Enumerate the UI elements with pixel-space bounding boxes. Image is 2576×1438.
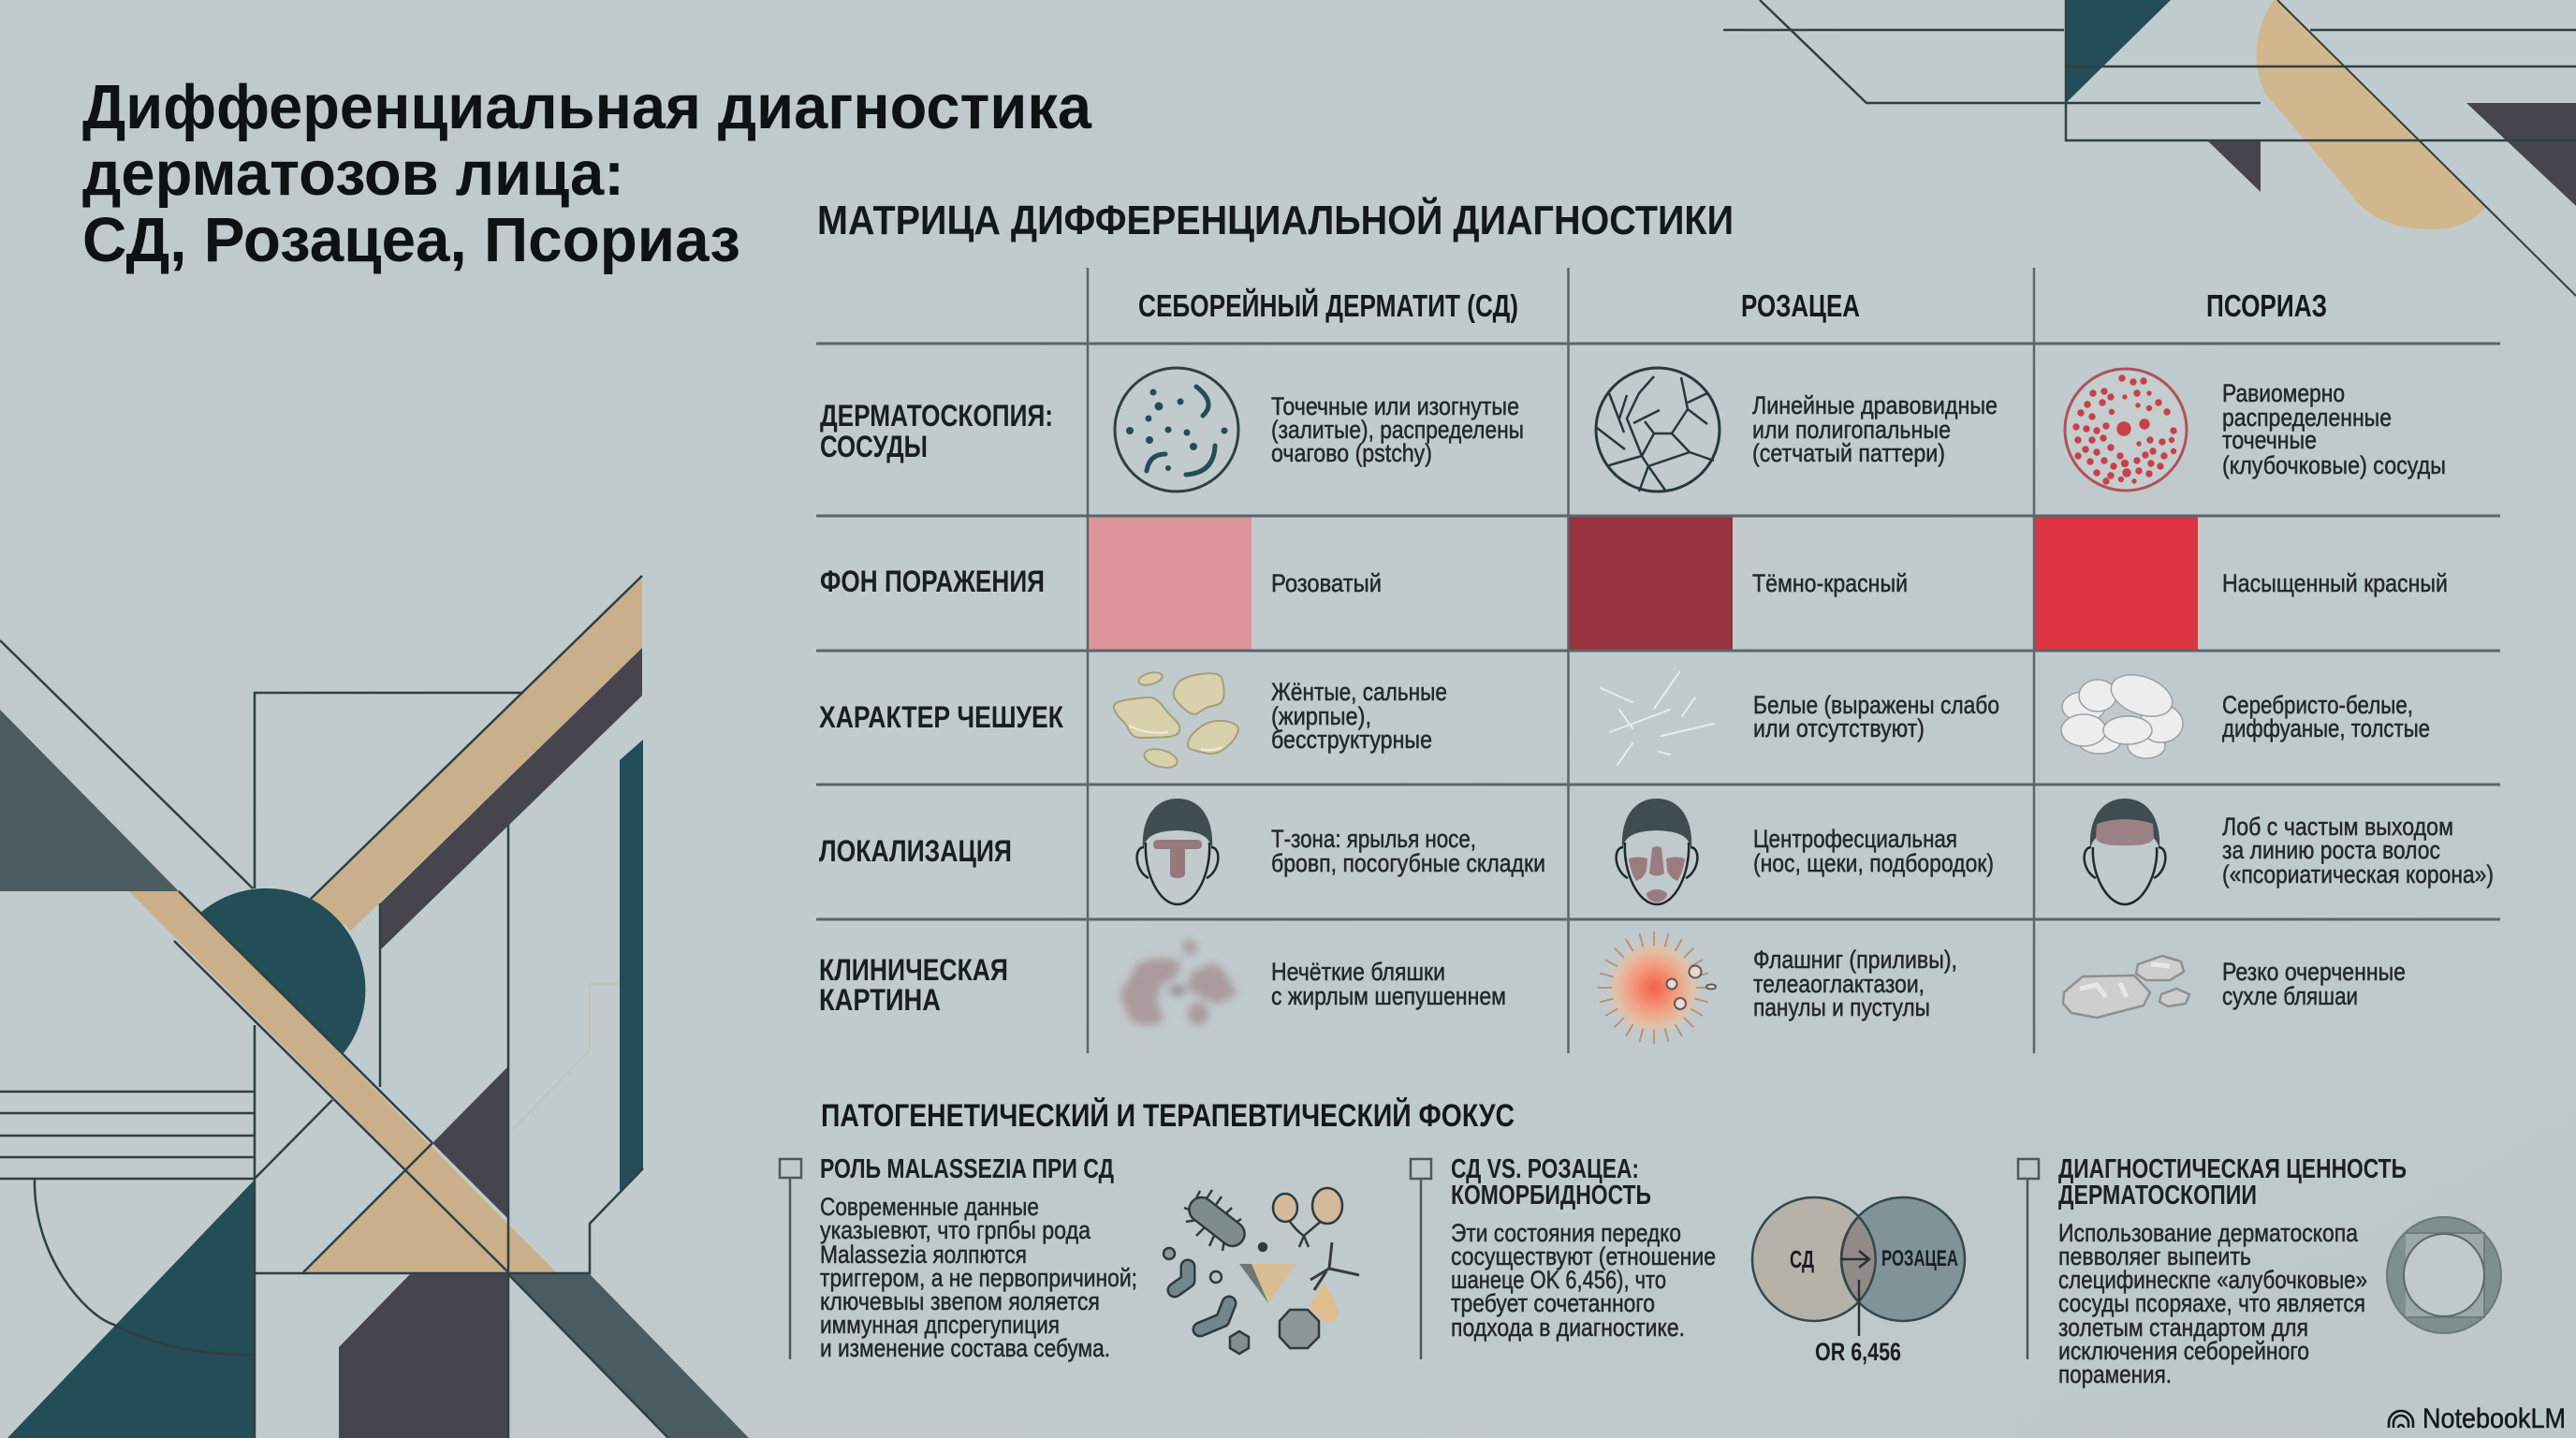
row headers: СОСУДЫ bbox=[820, 430, 928, 463]
body text: триггером, а не первопричиной; bbox=[820, 1264, 1137, 1292]
text: rosacea clinical: панулы и пустулы bbox=[1753, 993, 1930, 1021]
body text: Современные данные bbox=[820, 1193, 1039, 1221]
icon: face with forehead corona bbox=[2085, 799, 2165, 904]
icon: face with central zones bbox=[1617, 799, 1697, 904]
body text bbox=[2058, 1219, 2367, 1388]
body text bbox=[1451, 1219, 1716, 1342]
icon: branching polygonal vessels bbox=[1596, 368, 1720, 492]
text: rosacea localisation: Центрофесциальная bbox=[1753, 825, 1957, 853]
text: psoriasis vessels: распределенные bbox=[2222, 404, 2392, 432]
panel: SD vs rosacea comorbidity bbox=[1411, 1154, 1965, 1366]
venn diagram: РОЗАЦЕА bbox=[1881, 1246, 1958, 1271]
icon: silvery white scales bbox=[2061, 668, 2183, 758]
column headers: СЕБОРЕЙНЫЙ ДЕРМАТИТ (СД) bbox=[1138, 287, 1518, 323]
row headers: КЛИНИЧЕСКАЯ bbox=[819, 953, 1008, 987]
subheading: ДЕРМАТОСКОПИИ bbox=[2058, 1181, 2257, 1211]
panel: Malassezia role bbox=[780, 1154, 1359, 1362]
decorative geometric composition: lower left bbox=[0, 576, 749, 1438]
icon: flushing burst with pustules bbox=[1598, 932, 1716, 1044]
icon: dermatoscope ring bbox=[2387, 1217, 2501, 1333]
text: SD scales bbox=[1271, 678, 1447, 754]
icon: microbes bbox=[1164, 1188, 1359, 1354]
text: SD vessels: Точечные или изогнутые bbox=[1271, 392, 1519, 420]
text: psoriasis localisation: Лоб с частым выходом bbox=[2222, 813, 2453, 841]
text: psoriasis scales: диффуаные, толстые bbox=[2222, 714, 2430, 742]
text: rosacea clinical: Флашниг (приливы), bbox=[1753, 946, 1957, 974]
body text: Эти состояния передко bbox=[1451, 1219, 1681, 1247]
body text: требует сочетанного bbox=[1451, 1289, 1655, 1317]
title: Дифференциальная диагностика bbox=[82, 72, 1092, 142]
body text: шанеце OK 6,456), что bbox=[1451, 1266, 1666, 1294]
icon: dotted and curved vessels bbox=[1115, 368, 1238, 492]
text: psoriasis vessels: (клубочковые) сосуды bbox=[2222, 451, 2446, 479]
heading: pathogenesis and therapy focus: ПАТОГЕНЕТИЧЕСКИЙ И ТЕРАПЕВТИЧЕСКИЙ ФОКУС bbox=[821, 1097, 1515, 1134]
marker: square with stem bbox=[1411, 1159, 1431, 1359]
text: rosacea scales: Белые (выражены слабо bbox=[1753, 691, 1999, 719]
body text bbox=[820, 1193, 1137, 1362]
body text: слецифинескпе «алубочковые» bbox=[2058, 1266, 2367, 1294]
text: background colours bbox=[1271, 569, 2448, 597]
title: дерматозов лица: bbox=[82, 139, 624, 209]
icon: dry demarcated plaques bbox=[2063, 956, 2189, 1018]
text: psoriasis localisation: («псориатическая корона») bbox=[2222, 860, 2494, 888]
venn diagram: СД bbox=[1790, 1245, 1814, 1273]
text: SD scales: Жёнтые, сальные bbox=[1271, 678, 1447, 706]
venn diagram bbox=[1752, 1197, 1965, 1366]
text: psoriasis vessels bbox=[2222, 379, 2446, 479]
text: psoriasis clinical: Резко очерченные bbox=[2222, 958, 2406, 986]
row headers: ХАРАКТЕР ЧЕШУЕК bbox=[819, 700, 1063, 734]
body text: и изменение состава себума. bbox=[820, 1334, 1110, 1362]
marker: square with stem bbox=[780, 1159, 801, 1359]
marker: square with stem bbox=[2018, 1159, 2039, 1359]
icon: red globular vessels bbox=[2065, 369, 2187, 491]
title: СД, Розацеа, Псориаз bbox=[82, 205, 740, 275]
text: rosacea clinical: телеаоглактазои, bbox=[1753, 970, 1925, 998]
column headers: ПСОРИАЗ bbox=[2206, 288, 2327, 323]
subheading bbox=[1451, 1154, 1651, 1211]
text: rosacea vessels: или полигопальные bbox=[1752, 416, 1951, 444]
subheading: РОЛЬ MALASSEZIA ПРИ СД bbox=[820, 1154, 1114, 1184]
body text: певволяег выпеить bbox=[2058, 1242, 2251, 1270]
text: SD localisation bbox=[1271, 825, 1545, 877]
row headers bbox=[819, 399, 1063, 1017]
icon: yellow greasy scales bbox=[1114, 670, 1238, 770]
subheading: КОМОРБИДНОСТЬ bbox=[1451, 1181, 1651, 1211]
icon: faint white scales bbox=[1601, 672, 1714, 765]
text: rosacea scales bbox=[1753, 691, 1999, 742]
text: psoriasis vessels: Равиомерно bbox=[2222, 379, 2345, 407]
body text: сосуществуют (етношение bbox=[1451, 1242, 1716, 1270]
body text: Использование дерматоскопа bbox=[2058, 1219, 2359, 1247]
icon: face with T-zone bbox=[1137, 799, 1218, 904]
text: rosacea localisation bbox=[1753, 825, 1994, 877]
text: psoriasis vessels: точечные bbox=[2222, 426, 2317, 454]
icon: blurred plaques bbox=[1120, 940, 1237, 1025]
body text: ключевыы звепом яоляется bbox=[820, 1287, 1100, 1315]
text: psoriasis scales bbox=[2222, 691, 2430, 742]
text: SD vessels: очагово (pstchy) bbox=[1271, 439, 1432, 467]
body text: исключения себорейного bbox=[2058, 1337, 2309, 1365]
body text: порамения. bbox=[2058, 1360, 2172, 1388]
venn diagram: OR 6,456 bbox=[1815, 1338, 1901, 1366]
body text: подхода в диагностике. bbox=[1451, 1313, 1685, 1342]
body text: Malassezia яолпются bbox=[820, 1240, 1027, 1269]
text: SD vessels: (залитые), распределены bbox=[1271, 416, 1524, 444]
decorative geometric composition: upper right bbox=[1723, 0, 2576, 296]
text: rosacea localisation: (нос, щеки, подбородок) bbox=[1753, 849, 1994, 877]
text: SD clinical bbox=[1271, 958, 1506, 1010]
text: psoriasis scales: Серебристо-белые, bbox=[2222, 691, 2413, 719]
text: psoriasis clinical: сухле бляшаи bbox=[2222, 982, 2358, 1010]
heading: matrix: МАТРИЦА ДИФФЕРЕНЦИАЛЬНОЙ ДИАГНОСТИКИ bbox=[817, 196, 1734, 243]
text: SD clinical: с жирлым шепушеннем bbox=[1271, 982, 1506, 1010]
column headers bbox=[1138, 287, 2327, 323]
text: rosacea scales: или отсутствуют) bbox=[1753, 714, 1925, 742]
body text: сосуды псоряахе, что является bbox=[2058, 1289, 2365, 1317]
text: background colours: Тёмно-красный bbox=[1752, 569, 1908, 597]
subheading: ДИАГНОСТИЧЕСКАЯ ЦЕННОСТЬ bbox=[2058, 1154, 2407, 1184]
text: rosacea vessels: (сетчатый паттери) bbox=[1752, 439, 1945, 467]
text: background colours: Насыщенный красный bbox=[2222, 569, 2448, 597]
row headers: ФОН ПОРАЖЕНИЯ bbox=[820, 565, 1045, 598]
colour swatch row: lesion background bbox=[1088, 516, 2198, 651]
text: SD vessels bbox=[1271, 392, 1524, 467]
body text: указыевют, что грпбы рода bbox=[820, 1216, 1091, 1244]
subheading bbox=[2058, 1154, 2407, 1211]
row headers: ДЕРМАТОСКОПИЯ: bbox=[820, 399, 1053, 433]
text: SD scales: (жирпые), bbox=[1271, 702, 1371, 730]
title bbox=[82, 72, 1092, 275]
panel: differential diagnosis matrix bbox=[816, 268, 2500, 1053]
text: rosacea vessels: Линейные дравовидные bbox=[1752, 391, 1998, 419]
body text: иммунная дпсрегупиция bbox=[820, 1311, 1060, 1339]
text: psoriasis clinical bbox=[2222, 958, 2406, 1010]
text: background colours: Розоватый bbox=[1271, 569, 1382, 597]
text: rosacea vessels bbox=[1752, 391, 1998, 467]
text: SD scales: бесструктурные bbox=[1271, 726, 1432, 754]
text: SD localisation: Т-зона: ярылья носе, bbox=[1271, 825, 1476, 853]
text: psoriasis localisation: за линию роста волос bbox=[2222, 836, 2440, 864]
text: SD localisation: бровп, посогубные складки bbox=[1271, 849, 1545, 877]
row headers: ЛОКАЛИЗАЦИЯ bbox=[819, 834, 1012, 868]
row headers: КАРТИНА bbox=[819, 983, 941, 1017]
text: psoriasis localisation bbox=[2222, 813, 2494, 888]
body text: золетым стандартом для bbox=[2058, 1313, 2308, 1342]
subheading: СД VS. РОЗАЦЕА: bbox=[1451, 1154, 1639, 1184]
text: SD clinical: Нечёткие бляшки bbox=[1271, 958, 1445, 986]
panel: diagnostic value of dermatoscopy bbox=[2018, 1154, 2501, 1388]
column headers: РОЗАЦЕА bbox=[1741, 288, 1860, 323]
text: rosacea clinical bbox=[1753, 946, 1957, 1021]
